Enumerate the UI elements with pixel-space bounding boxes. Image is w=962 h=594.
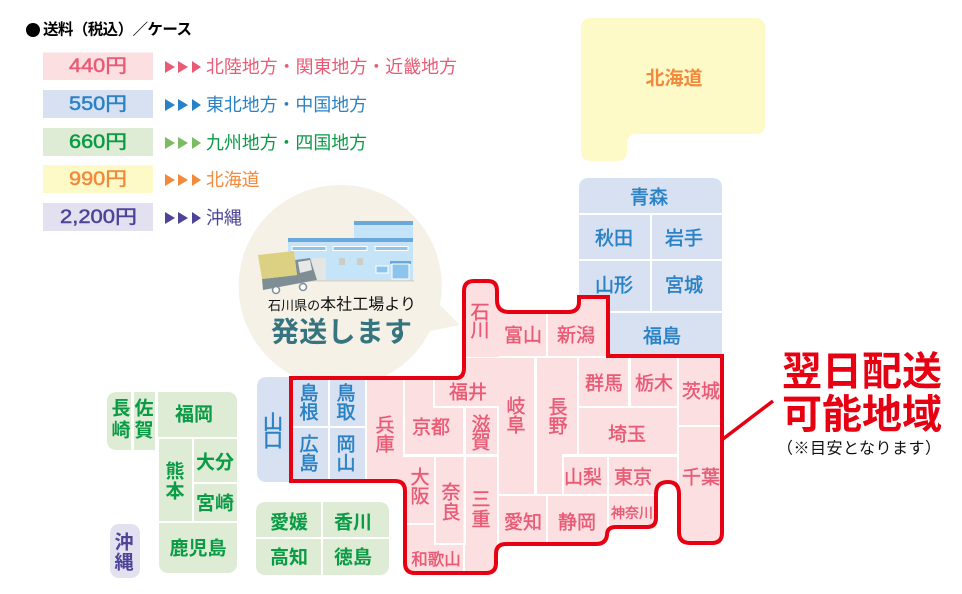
- callout: next-day delivery: （※目安となります）: [777, 440, 941, 458]
- Tochigi: 栃木: [635, 372, 673, 394]
- Osaka: 阪: [410, 486, 430, 508]
- Okayama: 岡: [336, 434, 356, 456]
- region: Tohoku, outside next-day area: [579, 178, 722, 356]
- legend row: 990 yen: 北海道: [206, 170, 260, 190]
- Fukui: 福井: [449, 382, 487, 404]
- Tokushima: 徳島: [334, 546, 372, 568]
- callout: next-day delivery: [777, 350, 942, 458]
- legend row: 550 yen: 550円: [69, 94, 127, 115]
- Kochi: 高知: [270, 546, 308, 568]
- Okayama: [330, 428, 365, 482]
- Nagasaki: 長: [111, 398, 131, 420]
- Fukuoka: [158, 392, 237, 437]
- Iwate: 岩手: [665, 228, 703, 250]
- Shimane: 根: [299, 402, 319, 424]
- callout: next-day delivery: 翌日配送: [782, 350, 942, 394]
- Niigata: 新潟: [557, 324, 595, 346]
- legend row: 550 yen: [43, 90, 367, 118]
- Aomori: 青森: [630, 186, 668, 208]
- region: Shikoku: [256, 502, 389, 575]
- Gunma: [579, 358, 628, 406]
- Shizuoka: 静岡: [558, 512, 596, 534]
- Nara: 奈: [441, 482, 461, 504]
- Tottori: 鳥: [336, 382, 356, 404]
- Fukuoka: 福岡: [175, 404, 213, 426]
- Miyazaki: [194, 484, 237, 521]
- icon: factory building: [288, 221, 414, 282]
- Ibaraki: [679, 358, 724, 425]
- region: Kyushu: [107, 392, 237, 573]
- region: Okinawa: 沖: [114, 532, 134, 554]
- arrow: callout line: [723, 401, 773, 439]
- Kyoto: 京都: [412, 416, 450, 438]
- Kumamoto: [159, 439, 192, 521]
- Nara: [436, 457, 464, 543]
- Hiroshima: 島: [299, 452, 319, 474]
- legend row: 440 yen: 440円: [69, 56, 127, 77]
- callout: next-day delivery: 可能地域: [782, 393, 942, 437]
- speech bubble: factory: [239, 185, 460, 387]
- Toyama: [499, 311, 546, 356]
- Gifu: 岐: [506, 396, 526, 418]
- legend row: 660 yen: 九州地方・四国地方: [206, 133, 367, 153]
- legend row: 550 yen: 東北地方・中国地方: [206, 95, 367, 115]
- Shiga: [466, 408, 497, 454]
- Kumamoto: 本: [165, 480, 185, 502]
- prefecture cells in blue: [291, 378, 365, 482]
- bubble shape: [239, 185, 460, 387]
- Yamagata: [579, 261, 650, 311]
- Kyoto: [405, 376, 463, 454]
- region: Okinawa: [110, 524, 140, 578]
- Yamanashi: [564, 457, 607, 494]
- Iwate: [652, 215, 722, 259]
- Shimane: [291, 378, 328, 426]
- Miyagi: 宮城: [665, 274, 703, 296]
- Niigata: [548, 295, 608, 356]
- Ishikawa: 川: [470, 320, 490, 342]
- region: Hokkaido: [581, 18, 766, 161]
- Saitama: 埼玉: [608, 424, 646, 446]
- legend row: 2,200 yen: 2,200円: [60, 207, 137, 228]
- Kanagawa: [609, 496, 654, 526]
- Saitama: [579, 408, 677, 454]
- Hiroshima: [293, 428, 328, 479]
- Saga: [134, 392, 155, 450]
- Nagano: [537, 358, 577, 494]
- legend row: 2,200 yen: 沖縄: [206, 208, 242, 228]
- Chiba: [679, 427, 720, 541]
- region: Hokkaido: 北海道: [645, 68, 703, 90]
- Osaka: 大: [410, 466, 430, 488]
- legend row: 990 yen: [43, 165, 260, 193]
- Oita: [194, 439, 237, 482]
- Hyogo: 庫: [375, 434, 395, 456]
- Nagasaki: [107, 392, 131, 450]
- Ibaraki: 茨城: [682, 380, 720, 402]
- legend: shipping fee by region: [26, 20, 457, 231]
- region: Okinawa: 縄: [114, 552, 134, 574]
- Kagawa: 香川: [334, 512, 372, 534]
- legend row: 660 yen: 660円: [69, 132, 127, 153]
- Nagano: 野: [548, 416, 568, 438]
- Akita: [579, 215, 650, 259]
- Saga: 佐: [134, 398, 154, 420]
- Ishikawa: 石: [470, 302, 490, 324]
- Kagoshima: [159, 523, 237, 573]
- Yamanashi: 山梨: [564, 466, 602, 488]
- Mie: 三: [471, 490, 491, 510]
- Nara: 良: [441, 502, 461, 524]
- legend heading: 送料（税込）／ケース: [43, 20, 192, 38]
- Kumamoto: 熊: [165, 460, 185, 482]
- Tokyo: 東京: [614, 466, 652, 488]
- region: Yamaguchi: 山: [263, 411, 283, 434]
- Gifu: [499, 358, 534, 494]
- Oita: 大分: [196, 452, 234, 474]
- Wakayama: 和歌山: [411, 550, 461, 569]
- Toyama: 富山: [504, 324, 542, 346]
- Gifu: 阜: [506, 414, 526, 436]
- Tochigi: [631, 358, 677, 406]
- Osaka: [403, 457, 434, 523]
- Miyagi: [652, 261, 722, 311]
- Mie: [465, 457, 497, 575]
- Shimane: 島: [299, 382, 319, 404]
- Akita: 秋田: [595, 228, 633, 250]
- Shiga: 賀: [471, 432, 491, 454]
- prefecture cells in pink: [367, 279, 724, 575]
- Mie: 重: [471, 508, 491, 530]
- region: next-day delivery area map: [291, 279, 724, 575]
- Fukushima: 福島: [643, 326, 681, 348]
- Nagano: 長: [548, 398, 568, 418]
- Nagasaki: 崎: [111, 420, 131, 442]
- Fukui: [435, 358, 499, 406]
- Okayama: 山: [336, 452, 356, 474]
- Hyogo: [367, 376, 403, 482]
- Gunma: 群馬: [585, 372, 623, 394]
- Saga: 賀: [134, 420, 154, 442]
- Hyogo: 兵: [375, 414, 395, 436]
- region: Yamaguchi: 口: [263, 430, 283, 452]
- bubble headline: 発送します: [271, 316, 412, 348]
- red outline of next-day area: [291, 281, 722, 573]
- icon: delivery truck: [258, 251, 317, 294]
- Fukushima: [608, 313, 722, 356]
- Tokyo: [609, 457, 677, 494]
- Ehime: 愛媛: [270, 512, 308, 534]
- Aichi: 愛知: [504, 512, 542, 534]
- legend row: 660 yen: [43, 128, 367, 156]
- Chiba: 千葉: [682, 466, 720, 488]
- Aomori: [579, 178, 722, 213]
- Yamagata: 山形: [595, 274, 633, 296]
- Kagoshima: 鹿児島: [169, 538, 227, 560]
- legend row: 440 yen: 北陸地方・関東地方・近畿地方: [206, 57, 457, 77]
- Kanagawa: 神奈川: [611, 505, 653, 521]
- Aichi: [499, 496, 546, 546]
- bubble caption: 石川県の本社工場より: [268, 296, 416, 314]
- Tottori: 取: [336, 402, 356, 424]
- legend row: 2,200 yen: [43, 203, 242, 231]
- Tottori: [330, 378, 365, 426]
- Ishikawa: [466, 283, 499, 357]
- legend row: 990 yen: 990円: [69, 169, 127, 190]
- Shizuoka: [548, 496, 607, 546]
- legend row: 440 yen: [43, 52, 457, 80]
- Hiroshima: 広: [299, 434, 319, 456]
- Wakayama: [407, 525, 463, 571]
- Miyazaki: 宮崎: [196, 492, 234, 514]
- region: Yamaguchi: [257, 377, 291, 482]
- Shiga: 滋: [471, 414, 491, 436]
